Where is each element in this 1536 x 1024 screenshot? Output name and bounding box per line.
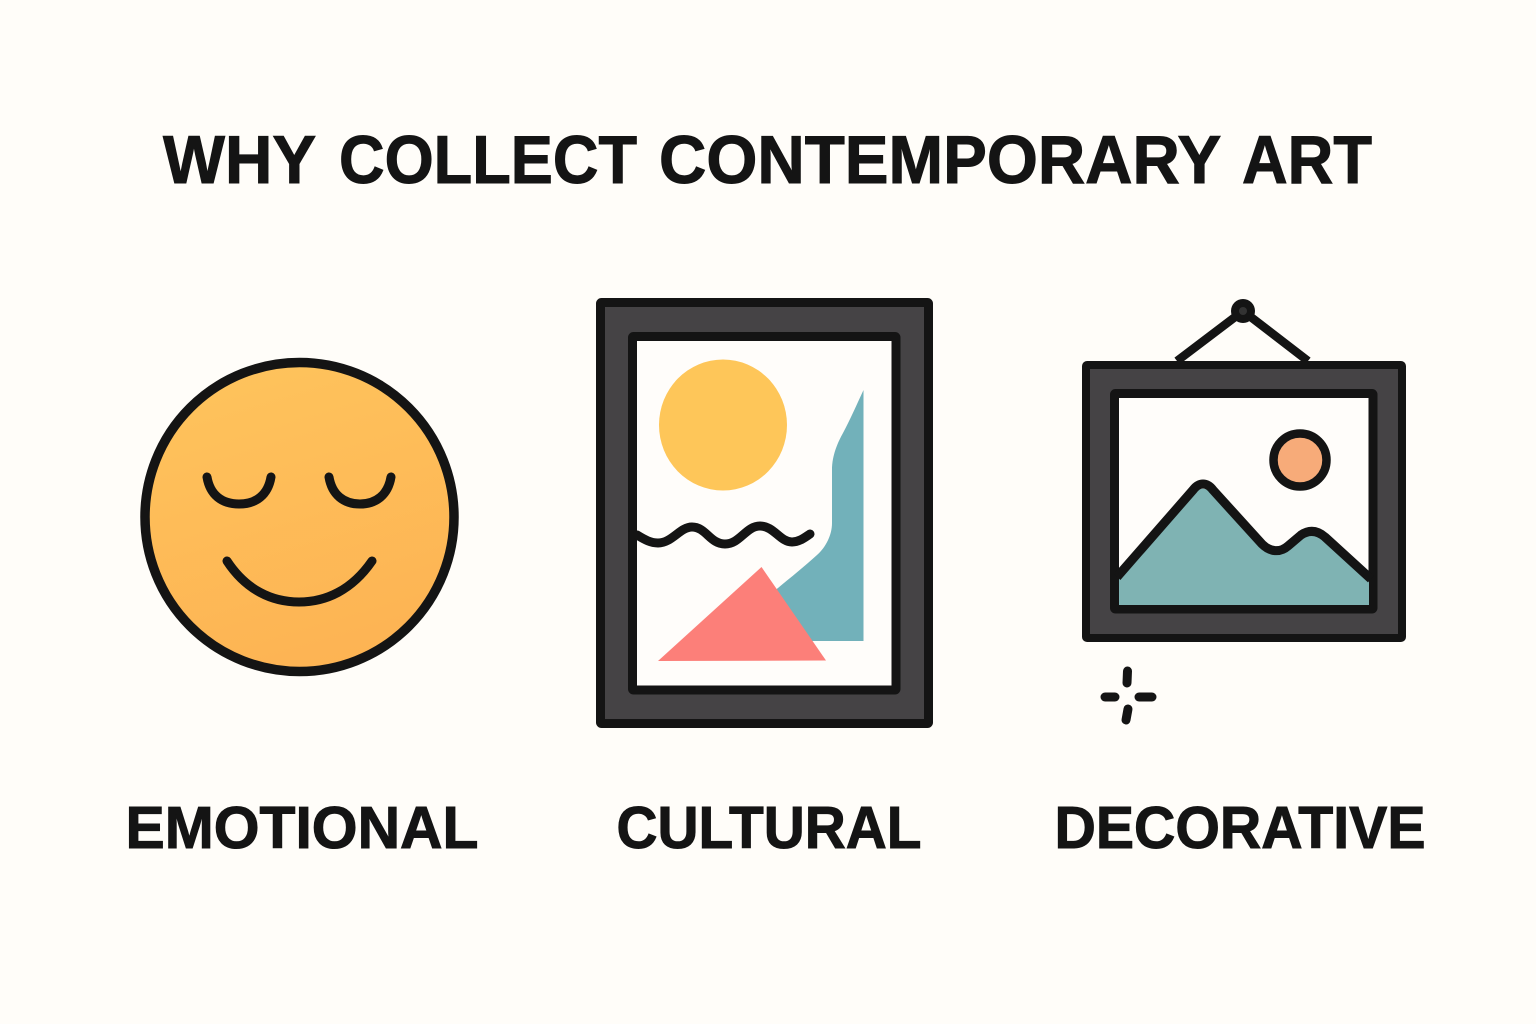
title: ART [1242,122,1372,198]
label: decorative: DECORATIVE [1054,795,1426,861]
icon: sparkle [1105,671,1152,720]
title: CONTEMPORARY [659,122,1221,198]
label: cultural: CULTURAL [616,795,922,861]
icon: emotional smiling face [145,362,454,672]
icon: cultural framed abstract artwork [600,302,928,724]
label: emotional: EMOTIONAL [126,795,478,861]
title: COLLECT [339,122,637,198]
title: WHY [163,122,316,198]
icon: decorative hanging picture [1086,299,1402,638]
